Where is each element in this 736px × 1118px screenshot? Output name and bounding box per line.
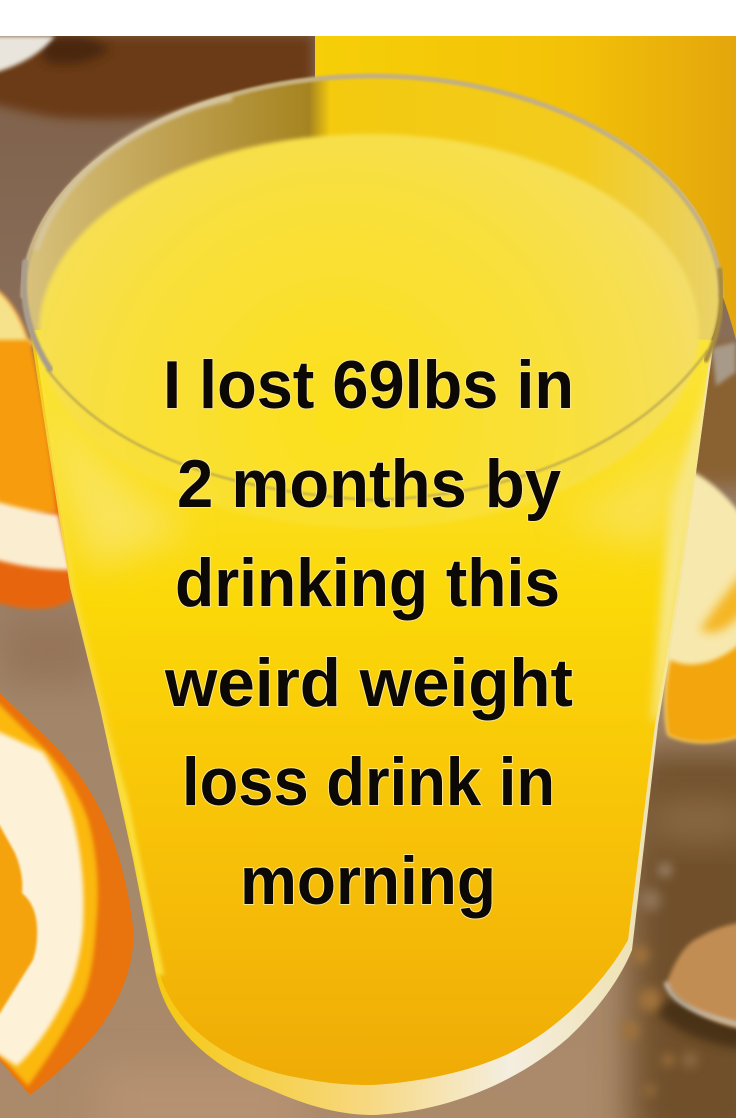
headline text: loss drink in <box>182 744 555 820</box>
spilled spice speckles <box>621 863 698 1095</box>
wooden table dark right side <box>0 345 736 1118</box>
glass highlights <box>25 340 720 975</box>
headline text: 2 months by <box>177 446 561 522</box>
headline text: weird weight <box>164 645 573 721</box>
juice surface <box>39 134 699 528</box>
juice body <box>33 330 712 1085</box>
spoon handle behind glass <box>712 342 736 386</box>
orange slice right <box>665 470 736 742</box>
rim left grey curve <box>24 262 50 369</box>
headline text: drinking this <box>175 545 560 621</box>
rim back edge <box>23 76 721 298</box>
rim interior band <box>26 80 720 340</box>
background pitcher of juice <box>315 36 736 340</box>
headline text: I lost 69lbs in <box>163 347 574 423</box>
orange wedge bottom left <box>0 688 133 1095</box>
background fruit <box>0 36 312 119</box>
headline text <box>163 347 574 919</box>
orange slice left <box>0 285 72 609</box>
glass wall <box>30 330 714 1115</box>
rim inner highlight <box>36 98 232 250</box>
rim right curve <box>706 270 721 360</box>
spoon with spice <box>655 922 736 1050</box>
rim front edge <box>47 350 708 500</box>
headline text: morning <box>240 843 496 919</box>
